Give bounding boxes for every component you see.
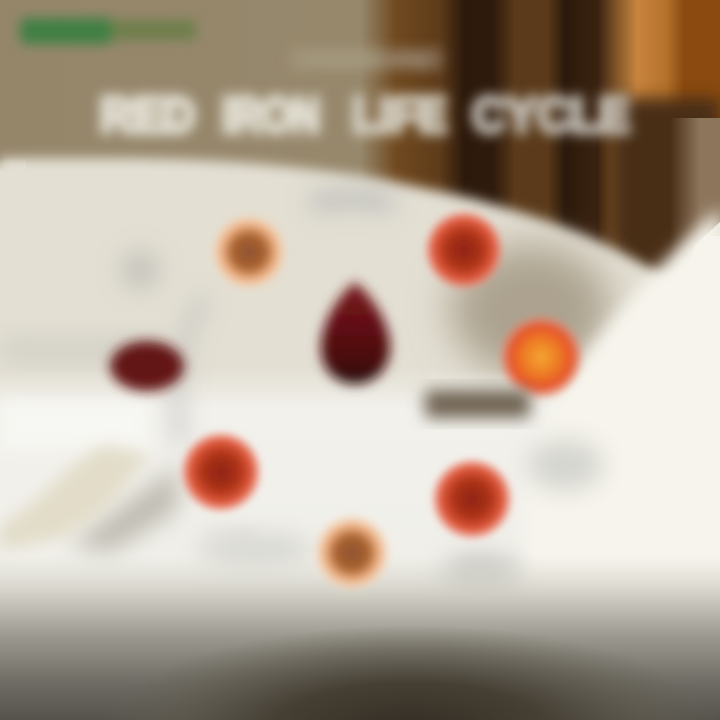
title: RED <box>100 87 195 143</box>
node: lower right <box>432 459 512 539</box>
node: right sun <box>500 316 582 398</box>
central blood drop <box>321 282 390 384</box>
node: bottom <box>314 515 390 591</box>
caption: bottom labels: Storage <box>205 522 255 538</box>
node: lower left <box>181 432 261 512</box>
caption: top label: Red Cells <box>317 192 383 209</box>
subtitle: Healthy Living <box>306 50 426 71</box>
node: top left <box>211 214 287 290</box>
title <box>100 87 630 143</box>
caption: right label: Iron Recycling <box>432 397 520 413</box>
title: IRON <box>222 87 320 143</box>
icon: left red capsule <box>110 341 184 391</box>
caption: bottom labels <box>205 522 523 568</box>
caption: right label <box>425 390 530 418</box>
logo <box>20 18 196 44</box>
title: CYCLE <box>472 87 630 143</box>
cycle ring <box>122 198 395 445</box>
logo: GREEN <box>24 22 84 41</box>
title: LIFE <box>352 87 447 143</box>
node: top right <box>425 211 503 289</box>
caption: bottom labels: Absorption <box>457 552 523 568</box>
